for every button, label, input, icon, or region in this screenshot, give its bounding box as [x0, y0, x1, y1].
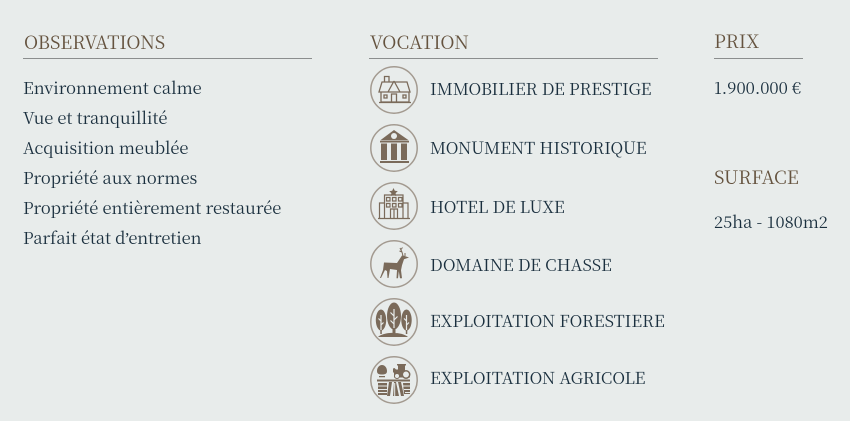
text: propriété aux normes: Propriété aux normes [23, 165, 197, 189]
text: price: 1.900.000 € [714, 75, 801, 99]
text: surface value: 25ha - 1080m2 [714, 209, 828, 233]
icon: trees [370, 298, 418, 346]
icon: stag [370, 240, 418, 288]
heading: prix: PRIX [714, 28, 759, 54]
panel: observations [23, 29, 312, 249]
icon: manor house [370, 66, 418, 114]
text: vue et tranquillité: Vue et tranquillité [23, 105, 167, 129]
text: propriété entièrement restaurée: Propriété entièrement restaurée [23, 195, 281, 219]
text: acquisition meublée: Acquisition meublée [23, 135, 188, 159]
label: immobilier de prestige: IMMOBILIER DE PRESTIGE [430, 76, 651, 100]
heading: observations: OBSERVATIONS [24, 29, 165, 55]
label: exploitation forestiere: EXPLOITATION FORESTIERE [430, 308, 665, 332]
heading: surface: SURFACE [714, 164, 799, 190]
label: monument historique: MONUMENT HISTORIQUE [430, 135, 647, 159]
icon: monument [370, 124, 418, 172]
panel: vocation [369, 29, 665, 389]
text: environnement calme: Environnement calme [23, 75, 202, 99]
label: exploitation agricole: EXPLOITATION AGRICOLE [430, 365, 645, 389]
panel: surface [714, 164, 828, 233]
label: hotel de luxe: HOTEL DE LUXE [430, 194, 565, 218]
text: parfait état d'entretien: Parfait état d’entretien [23, 225, 201, 249]
label: domaine de chasse: DOMAINE DE CHASSE [430, 252, 612, 276]
icon: tractor and field [370, 356, 418, 404]
heading: vocation: VOCATION [370, 29, 469, 55]
icon: hotel [370, 182, 418, 230]
panel: prix [714, 28, 803, 99]
